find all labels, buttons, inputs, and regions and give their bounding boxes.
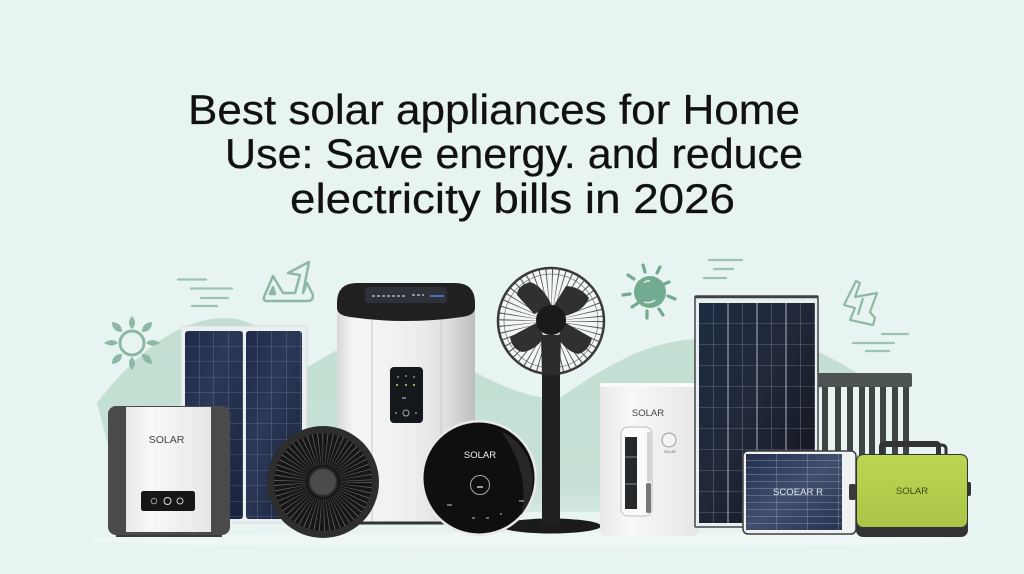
portable solar tablet: SCOEAR R xyxy=(773,487,823,498)
standing fan xyxy=(498,268,604,534)
icon: mountain arrow xyxy=(264,262,313,301)
fan blades xyxy=(510,282,592,354)
icon: wind lines lightning xyxy=(853,334,908,351)
title: Best solar appliances for Home xyxy=(188,86,800,133)
portable solar tablet xyxy=(743,451,856,534)
icon: lightning bolts xyxy=(844,281,877,325)
white purifier: SOLAR xyxy=(664,450,676,454)
solar panel left xyxy=(181,326,307,523)
white purifier xyxy=(600,383,699,536)
white purifier: SOLAR xyxy=(632,408,664,419)
icon: wind lines right xyxy=(704,260,742,278)
round black fan xyxy=(267,426,379,538)
green hills backdrop xyxy=(97,318,858,512)
solar inverter: SOLAR xyxy=(149,434,185,446)
solar inverter xyxy=(108,406,230,537)
title xyxy=(188,86,803,222)
icon: outline sun left xyxy=(104,316,160,370)
green power station xyxy=(856,441,971,537)
green power station: SOLAR xyxy=(896,486,928,497)
water heater tank xyxy=(337,283,475,524)
round black controller xyxy=(421,420,537,536)
icon: filled sun right xyxy=(623,265,675,318)
icon: wind lines left xyxy=(178,280,232,306)
title: Use: Save energy. and reduce xyxy=(225,130,803,177)
solar panel large xyxy=(695,296,818,527)
title: electricity bills in 2026 xyxy=(290,175,735,222)
radiator xyxy=(818,373,912,457)
round black controller: SOLAR xyxy=(464,450,496,461)
ground glow xyxy=(90,533,970,547)
